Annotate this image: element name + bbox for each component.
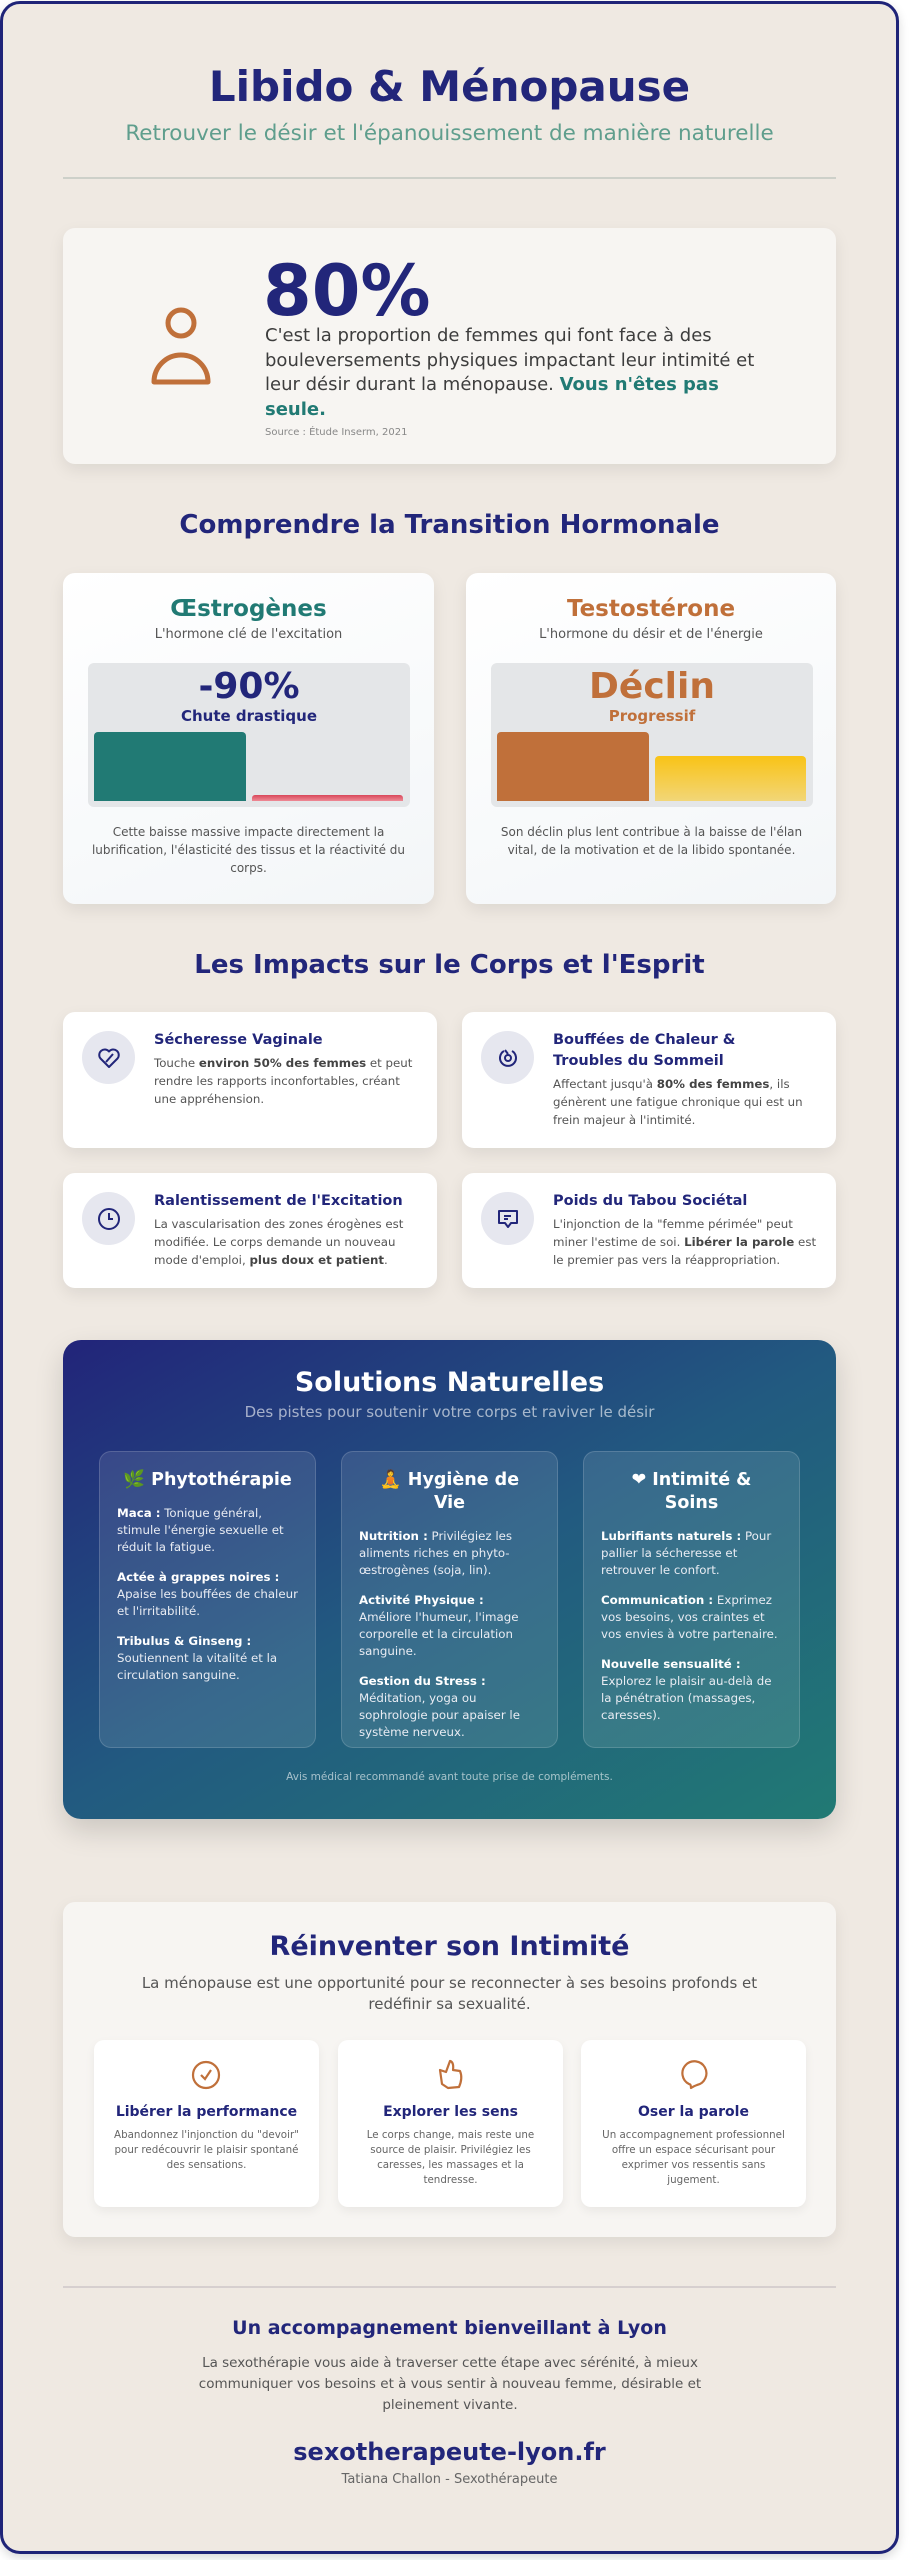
bar chart: oestrogenes: -90% <box>198 666 300 707</box>
card: bouffees: Affectant jusqu'à 80% des femmes, ils génèrent une fatigue chronique qui est un frein majeur à l'intimité. <box>553 1077 803 1127</box>
card: intimite et soins: Lubrifiants naturels : Pour pallier la sécheresse et retrouver le confort. <box>601 1529 771 1577</box>
card: intimite et soins: Soins <box>665 1493 718 1513</box>
panel: oestrogenes <box>63 573 434 904</box>
icon: check circle <box>192 2060 220 2090</box>
card: liberer: Abandonnez l'injonction du "devoir" pour redécouvrir le plaisir spontané des sensations. <box>114 2129 299 2171</box>
bar chart: oestrogenes: Chute drastique <box>181 707 317 725</box>
card: phytotherapie: Actée à grappes noires : Apaise les bouffées de chaleur et l'irritabilité. <box>117 1570 298 1618</box>
subtitle: Retrouver le désir et l'épanouissement de manière naturelle <box>125 121 774 146</box>
card: bouffees: Bouffées de Chaleur & <box>553 1032 735 1048</box>
bar chart: testosterone <box>491 663 813 807</box>
icon: heart <box>82 1031 135 1084</box>
bar chart: testosterone: Déclin <box>589 666 715 707</box>
card: liberer <box>94 2040 319 2207</box>
card: secheresse: Touche environ 50% des femmes et peut rendre les rapports inconfortables, créant une appréhension. <box>154 1056 412 1106</box>
card: oser: Un accompagnement professionnel offre un espace sécurisant pour exprimer vos ressentis sans jugement. <box>602 2129 785 2186</box>
icon: clock <box>82 1192 135 1245</box>
panel: solutions naturelles <box>63 1340 836 1819</box>
panel: solutions naturelles: Des pistes pour soutenir votre corps et raviver le désir <box>245 1403 654 1421</box>
card: phytotherapie: Tribulus & Ginseng : Soutiennent la vitalité et la circulation sanguine. <box>117 1634 277 1682</box>
panel: reinventer <box>63 1902 836 2237</box>
card: tabou: Poids du Tabou Sociétal <box>553 1193 747 1209</box>
footer heading: Un accompagnement bienveillant à Lyon <box>232 2317 667 2339</box>
card: bouffees <box>462 1012 836 1148</box>
card: explorer: Le corps change, mais reste une source de plaisir. Privilégiez les caresses, les massages et la tendresse. <box>367 2129 534 2186</box>
card: intimite et soins <box>583 1451 800 1748</box>
card: intimite et soins: Nouvelle sensualité : Explorez le plaisir au-delà de la pénétration (massages, caresses). <box>601 1657 772 1722</box>
icon: message <box>481 1192 534 1245</box>
footer url: sexotherapeute-lyon.fr <box>293 2438 606 2466</box>
card: phytotherapie <box>99 1451 316 1748</box>
card: hygiene de vie: 🧘 Hygiène de <box>380 1470 519 1490</box>
note: Avis médical recommandé avant toute prise de compléments. <box>286 1771 613 1783</box>
card: intimite et soins: Communication : Exprimez vos besoins, vos craintes et vos envies à votre partenaire. <box>601 1593 778 1641</box>
card: hygiene de vie: Nutrition : Privilégiez les aliments riches en phyto-œstrogènes (soja, lin). <box>359 1529 512 1577</box>
card: bouffees: Troubles du Sommeil <box>553 1053 724 1069</box>
card: explorer: Explorer les sens <box>383 2104 518 2120</box>
card: tabou <box>462 1173 836 1288</box>
card: secheresse: Sécheresse Vaginale <box>154 1032 323 1048</box>
panel: testosterone: L'hormone du désir et de l'énergie <box>539 627 763 642</box>
footer text: La sexothérapie vous aide à traverser cette étape avec sérénité, à mieux communiquer vos besoins et à vous sentir à nouveau femme, désirable et pleinement vivante. <box>199 2355 701 2413</box>
card: ralentissement: La vascularisation des zones érogènes est modifiée. Le corps demande un nouveau mode d'emploi, plus doux et patient. <box>154 1217 403 1267</box>
card: oser: Oser la parole <box>638 2104 749 2120</box>
bar chart: testosterone: Progressif <box>609 707 695 725</box>
card: hygiene de vie: Gestion du Stress : Méditation, yoga ou sophrologie pour apaiser le système nerveux. <box>359 1674 520 1739</box>
panel: testosterone <box>466 573 836 904</box>
card: ralentissement <box>63 1173 437 1288</box>
panel: solutions naturelles: Solutions Naturelles <box>295 1367 604 1398</box>
card: hygiene de vie: Activité Physique : <box>359 1593 484 1607</box>
big number: 80% <box>263 250 431 332</box>
panel: testosterone: Son déclin plus lent contribue à la baisse de l'élan vital, de la motivation et de la libido spontanée. <box>501 825 802 857</box>
bar chart: oestrogenes <box>88 663 410 807</box>
title: Libido & Ménopause <box>209 62 690 111</box>
card: phytotherapie: Maca : Tonique général, stimule l'énergie sexuelle et réduit la fatigue. <box>117 1506 284 1554</box>
panel: reinventer: Réinventer son Intimité <box>270 1931 629 1962</box>
card: oser <box>581 2040 806 2207</box>
card: hygiene de vie: Vie <box>434 1493 465 1513</box>
card: explorer <box>338 2040 563 2207</box>
heading: impacts: Les Impacts sur le Corps et l'Esprit <box>194 950 705 980</box>
card: tabou: L'injonction de la "femme périmée" peut miner l'estime de soi. Libérer la parole est le premier pas vers la réappropriation. <box>553 1217 816 1267</box>
icon: thumb <box>438 2060 462 2090</box>
icon: speech bubble <box>681 2060 708 2090</box>
icon: spiral <box>481 1031 534 1084</box>
card: hygiene de vie: Améliore l'humeur, l'image corporelle et la circulation sanguine. <box>359 1610 519 1658</box>
card: liberer: Libérer la performance <box>116 2104 297 2120</box>
panel: oestrogenes: L'hormone clé de l'excitation <box>155 627 342 642</box>
card: intimite et soins: ❤ Intimité & <box>632 1470 751 1490</box>
panel: oestrogenes: Cette baisse massive impacte directement la lubrification, l'élasticité des tissus et la réactivité du corps. <box>92 825 405 875</box>
panel: reinventer: La ménopause est une opportunité pour se reconnecter à ses besoins profonds et redéfinir sa sexualité. <box>142 1974 757 2013</box>
footer name: Tatiana Challon - Sexothérapeute <box>342 2472 557 2487</box>
panel: oestrogenes: Œstrogènes <box>170 596 327 622</box>
panel: testosterone: Testostérone <box>567 596 735 622</box>
stat text: C'est la proportion de femmes qui font face à des bouleversements physiques impactant leur intimité et leur désir durant la ménopause. Vous n'êtes pas seule. <box>265 325 754 420</box>
icon: person <box>152 308 210 384</box>
card: hygiene de vie <box>341 1451 558 1748</box>
card: secheresse <box>63 1012 437 1148</box>
card: phytotherapie: 🌿 Phytothérapie <box>123 1470 292 1490</box>
panel: stat 80% <box>63 228 836 464</box>
card: ralentissement: Ralentissement de l'Excitation <box>154 1193 403 1209</box>
source: Source : Étude Inserm, 2021 <box>265 427 407 438</box>
heading: hormonal: Comprendre la Transition Hormonale <box>179 510 720 540</box>
